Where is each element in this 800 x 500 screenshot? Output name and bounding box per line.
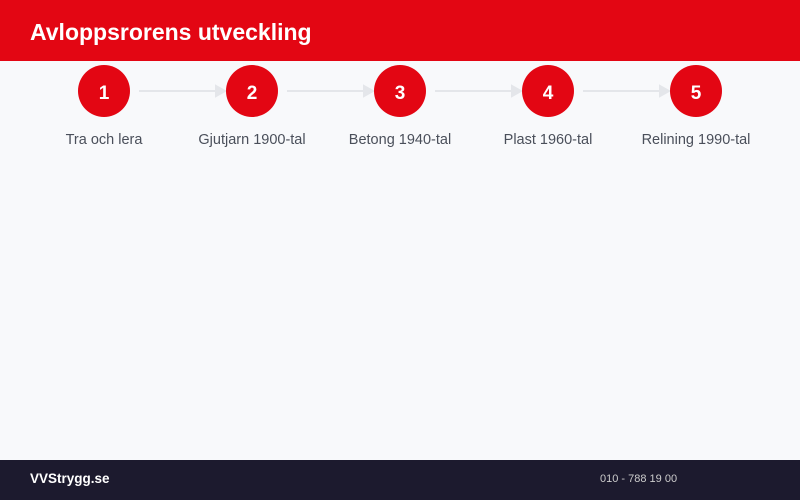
step 5: 5 <box>691 83 701 104</box>
phone: 010 - 788 19 00 <box>600 473 677 485</box>
label 1: Tra och lera <box>66 132 142 148</box>
step 3 <box>374 65 426 117</box>
step 2: 2 <box>247 83 257 104</box>
step 4 <box>522 65 574 117</box>
step 4: 4 <box>543 83 553 104</box>
footer <box>0 460 800 500</box>
label 2: Gjutjarn 1900-tal <box>198 132 306 148</box>
step 5 <box>670 65 722 117</box>
label 5: Relining 1990-tal <box>642 132 750 148</box>
brand: VVStrygg.se <box>30 471 110 486</box>
step 3: 3 <box>395 83 405 104</box>
label 3: Betong 1940-tal <box>349 132 451 148</box>
label 4: Plast 1960-tal <box>504 132 592 148</box>
header <box>0 0 800 61</box>
arrows <box>139 84 670 98</box>
step 1: 1 <box>99 83 109 104</box>
step 2 <box>226 65 278 117</box>
step 1 <box>78 65 130 117</box>
title: Avloppsrorens utveckling <box>30 19 312 45</box>
